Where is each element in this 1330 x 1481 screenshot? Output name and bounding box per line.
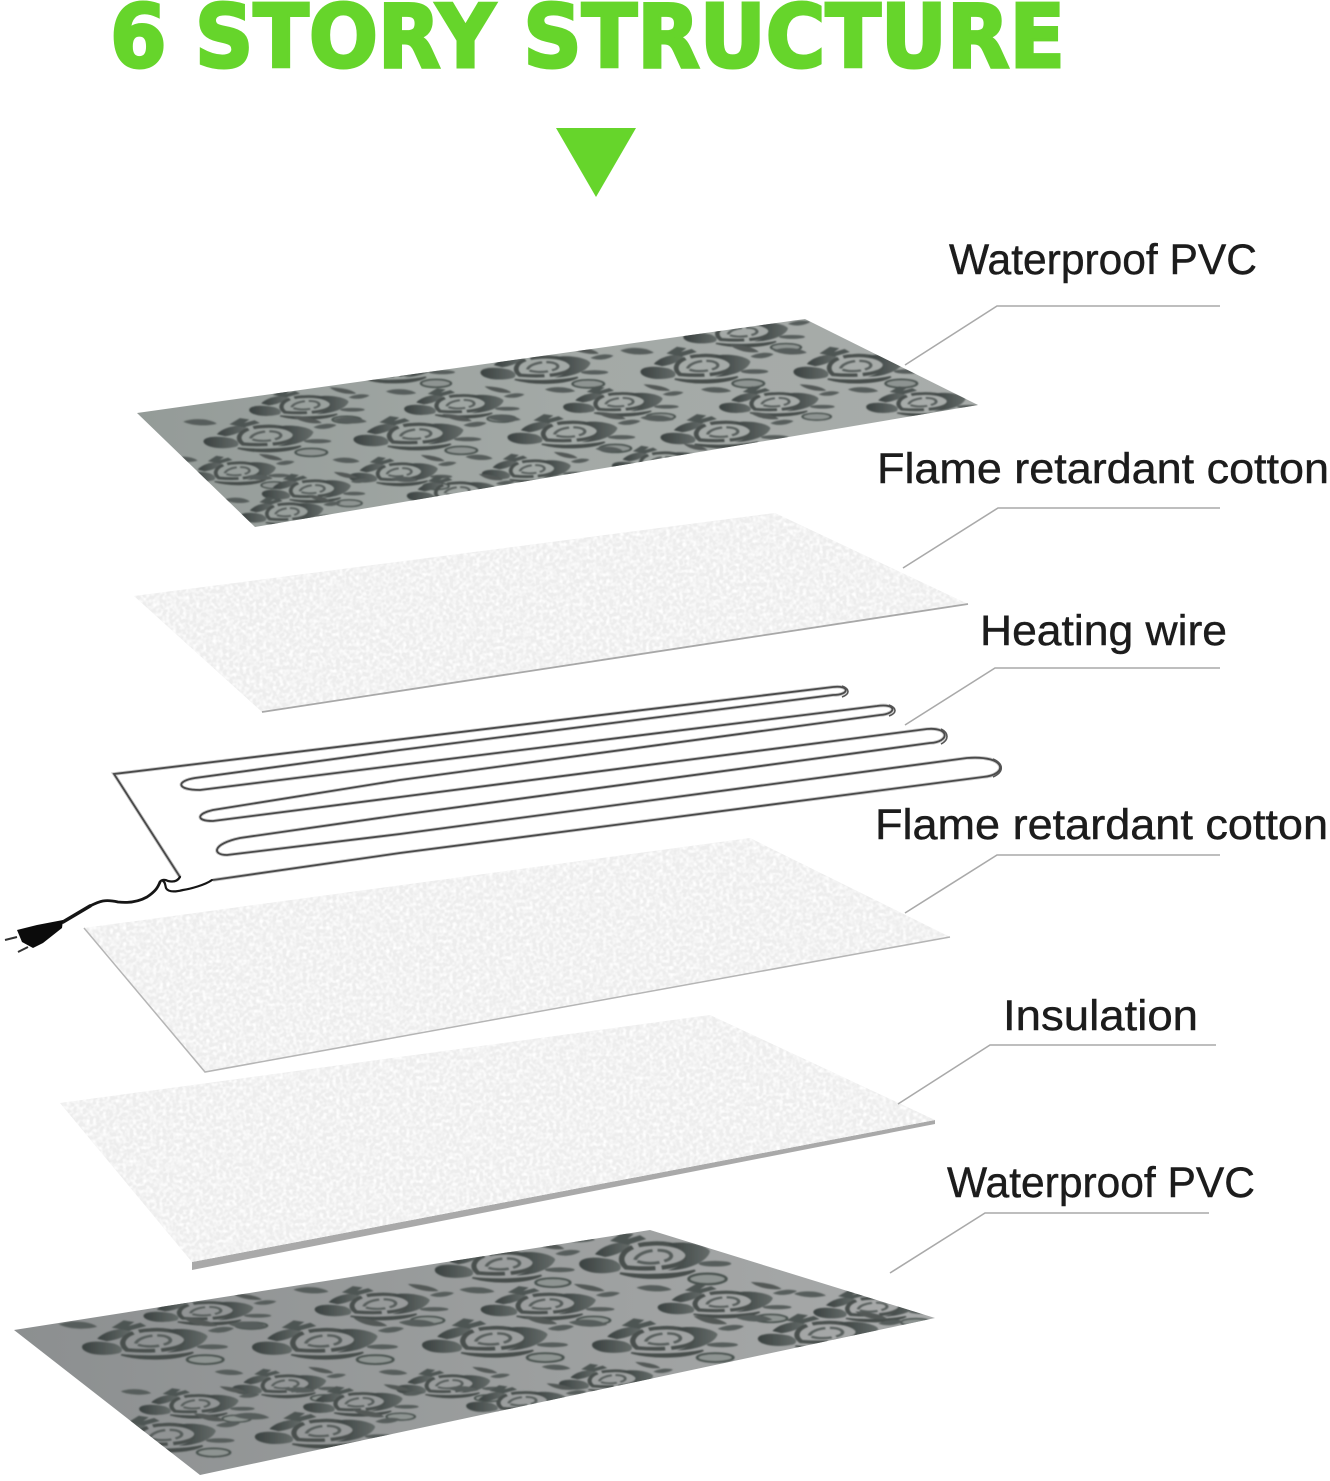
leader line: flame retardant cotton upper — [903, 508, 1220, 568]
wire serpentine — [114, 686, 1001, 880]
icon: plug — [17, 920, 63, 948]
label: flame retardant cotton upper: Flame retardant cotton — [877, 445, 1329, 493]
label: flame retardant cotton lower: Flame retardant cotton — [875, 801, 1328, 849]
layer 3: heating wire with plug — [5, 686, 1001, 952]
label: insulation: Insulation — [1003, 992, 1198, 1040]
layer 6: waterproof PVC sheet — [14, 1230, 940, 1475]
leader line: waterproof PVC bottom — [890, 1213, 1209, 1273]
label: heating wire: Heating wire — [980, 607, 1227, 655]
power cord — [63, 877, 212, 922]
leader line: heating wire — [905, 668, 1220, 725]
leader line: flame retardant cotton lower — [905, 855, 1220, 913]
leader line: waterproof PVC top — [905, 306, 1220, 365]
layer 4: flame retardant cotton sheet — [84, 838, 950, 1072]
icon: down arrow — [556, 128, 636, 197]
layer 1: waterproof PVC sheet — [137, 314, 986, 530]
layer 5: insulation sheet — [60, 1015, 935, 1270]
layer 2: flame retardant cotton sheet — [134, 513, 968, 712]
leader line: insulation — [898, 1045, 1216, 1104]
label: waterproof PVC top: Waterproof PVC — [949, 236, 1257, 284]
label: waterproof PVC bottom: Waterproof PVC — [947, 1159, 1255, 1207]
